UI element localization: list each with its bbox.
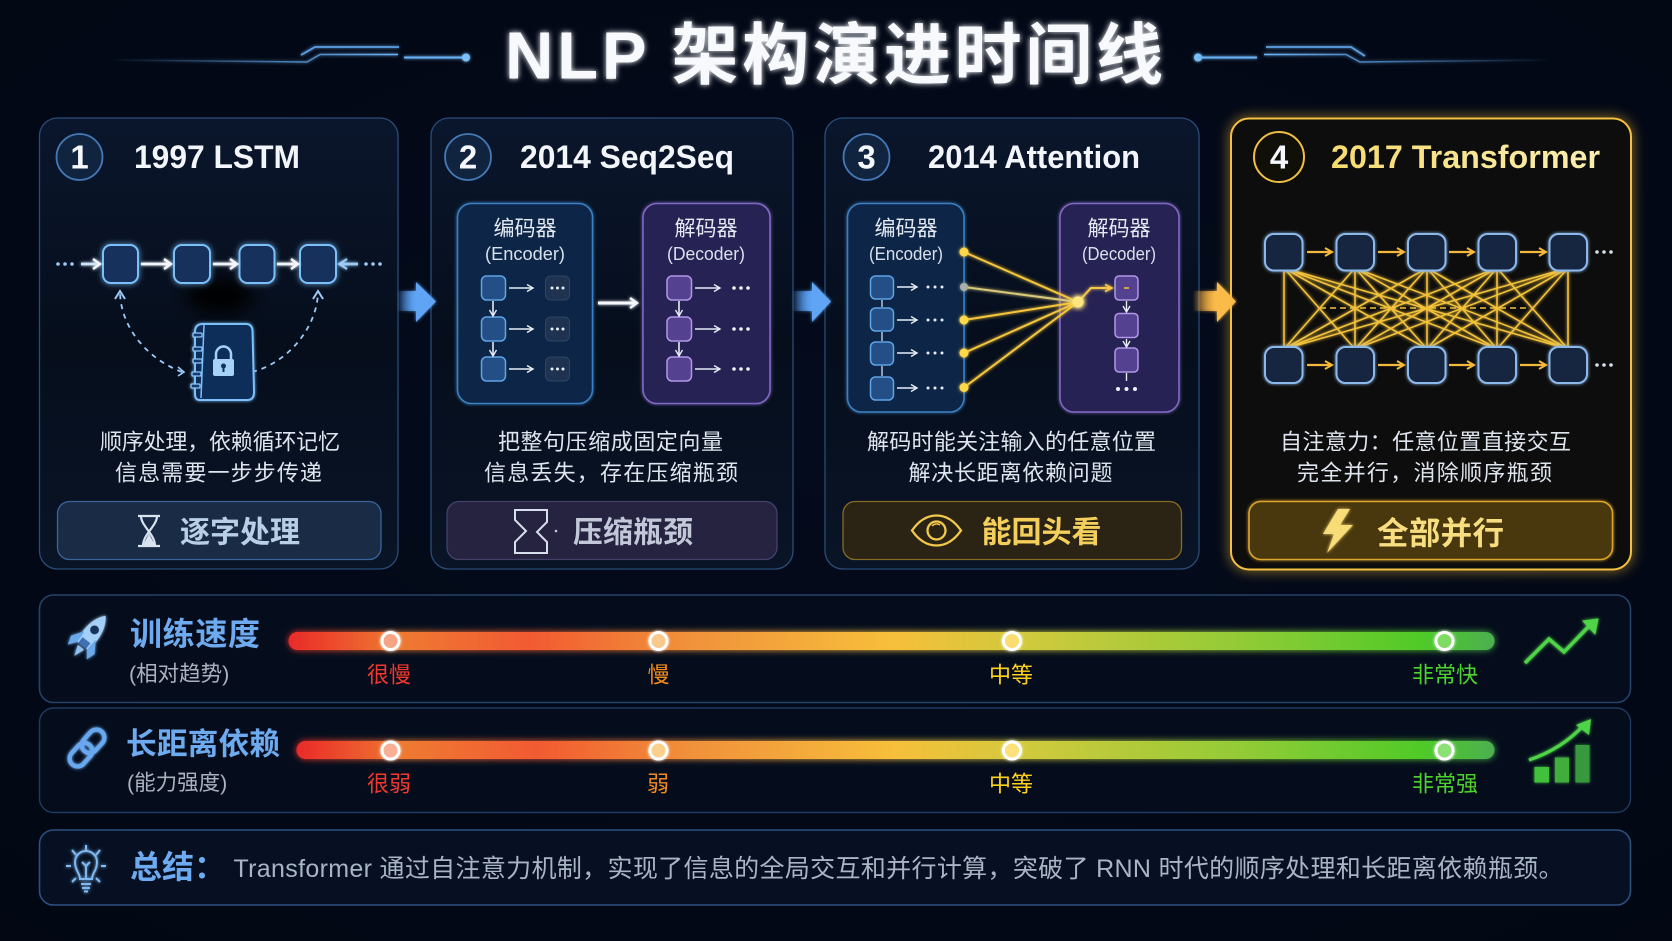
icon: eye [912, 516, 961, 546]
icon: lightning bolt [1323, 509, 1353, 553]
tag: 能回头看 [843, 502, 1182, 560]
memory notebook with lock [191, 324, 254, 400]
description: 解码时能关注输入的任意位置 [867, 430, 1156, 454]
arrow: step 1 to 2 [397, 282, 436, 322]
decoder block: (Decoder) [667, 244, 745, 264]
panel: long-range dependency [40, 708, 1630, 812]
description [1280, 430, 1571, 486]
description [867, 430, 1156, 486]
description: 信息需要一步步传递 [115, 460, 322, 486]
attention mesh lines [1284, 268, 1568, 349]
tag: 全部并行 [1249, 502, 1612, 560]
gradient scale: dependency [296, 741, 1494, 796]
heading: 1997 LSTM: 1997 LSTM [134, 139, 300, 175]
step badge 1 [56, 134, 102, 180]
chain nodes [103, 245, 336, 283]
bottom row nodes [1265, 347, 1587, 383]
encoder block [848, 204, 964, 412]
attention lines [960, 248, 1112, 392]
decoder block: (Decoder) [1082, 244, 1156, 264]
description [484, 430, 738, 486]
panel: summary [40, 830, 1630, 905]
icon: rising trend line [1525, 619, 1598, 663]
encoder block: 编码器 [494, 218, 556, 240]
metric title: 长距离依赖 [126, 726, 280, 762]
horizontal dashed attention line [1320, 307, 1530, 309]
encoder block: (Encoder) [869, 244, 943, 264]
tag: 全部并行: 全部并行 [1377, 515, 1504, 551]
icon: hourglass [138, 516, 160, 546]
encoder block: 编码器 [874, 218, 938, 240]
tag: 能回头看: 能回头看 [982, 516, 1102, 550]
icon: bottleneck [515, 510, 547, 553]
step badge 4 [1254, 132, 1304, 182]
heading: 2017 Transformer: 2017 Transformer [1331, 139, 1600, 175]
summary label: 总结： [130, 849, 226, 885]
description [100, 430, 340, 486]
step badge 3: 3 [857, 138, 876, 176]
icon: light bulb [66, 845, 106, 892]
title ornament: right [1194, 47, 1552, 62]
icon: rocket [62, 606, 117, 665]
icon: chain link [66, 726, 108, 770]
description: 自注意力：任意位置直接交互 [1280, 430, 1571, 454]
decoder block: 解码器 [1088, 218, 1150, 240]
decoder block [643, 204, 770, 404]
icon: rising bar chart [1529, 719, 1591, 782]
decoder block: 解码器 [674, 218, 738, 240]
sequence arrows [1307, 252, 1546, 365]
step badge 1: 1 [70, 138, 89, 176]
metric title: 训练速度 [130, 616, 260, 652]
gradient scale: dependency: 很弱 [367, 772, 411, 796]
gradient scale: speed: 很慢 [367, 662, 411, 688]
chain arrows [81, 263, 358, 265]
dark halo above notebook [186, 278, 254, 314]
gradient scale: dependency: 弱 [647, 772, 669, 796]
chain ellipses [56, 262, 382, 266]
title: NLP 架构演进时间线 [505, 18, 1163, 94]
gradient scale: speed: 中等 [989, 662, 1033, 688]
gradient scale: dependency: 中等 [989, 772, 1033, 796]
gradient scale: speed [288, 632, 1494, 688]
top row nodes [1265, 234, 1587, 270]
arrow: step 3 to 4 [1193, 282, 1236, 322]
gradient scale: dependency: 非常强 [1412, 772, 1478, 796]
description: 完全并行，消除顺序瓶颈 [1297, 460, 1552, 486]
description: 信息丢失，存在压缩瓶颈 [484, 460, 738, 486]
step badge 2 [445, 134, 491, 180]
description: 解决长距离依赖问题 [908, 460, 1112, 486]
summary text: Transformer 通过自注意力机制，实现了信息的全局交互和并行计算，突破了 RNN 时代的顺序处理和长距离依赖瓶颈。 [234, 855, 1564, 883]
panel: 2017 Transformer [1231, 118, 1631, 570]
metric subtitle: (相对趋势) [129, 662, 229, 686]
tag: 逐字处理 [58, 502, 381, 560]
decoder block [1060, 204, 1179, 412]
step badge 3 [844, 134, 890, 180]
gradient scale: speed: 非常快 [1412, 662, 1478, 688]
heading: 2014 Attention: 2014 Attention [928, 139, 1140, 175]
tag: 压缩瓶颈 [447, 502, 777, 560]
tag: 逐字处理: 逐字处理 [180, 516, 300, 550]
arrow: encoder to decoder [598, 302, 637, 304]
step badge 2: 2 [459, 138, 477, 176]
heading: 2014 Seq2Seq: 2014 Seq2Seq [520, 139, 734, 175]
panel: 1997 LSTM [40, 118, 398, 569]
encoder block: (Encoder) [485, 244, 565, 264]
metric subtitle: (能力强度) [127, 771, 227, 795]
encoder block [458, 204, 592, 404]
gradient scale: speed: 慢 [647, 662, 670, 688]
full connectivity mesh [1265, 234, 1613, 383]
tag: 压缩瓶颈: 压缩瓶颈 [573, 516, 693, 550]
description: 把整句压缩成固定向量 [498, 430, 723, 454]
title ornament: left [109, 47, 470, 62]
panel: training speed [40, 595, 1630, 702]
step badge 4: 4 [1270, 138, 1289, 176]
panel: 2014 Seq2Seq [431, 118, 793, 569]
description: 顺序处理，依赖循环记忆 [100, 430, 340, 454]
arrow: step 2 to 3 [792, 282, 831, 322]
diagram: LSTM chain with memory [56, 245, 382, 400]
memory feedback dashed arrows [120, 291, 318, 372]
panel: 2014 Attention [825, 118, 1199, 569]
